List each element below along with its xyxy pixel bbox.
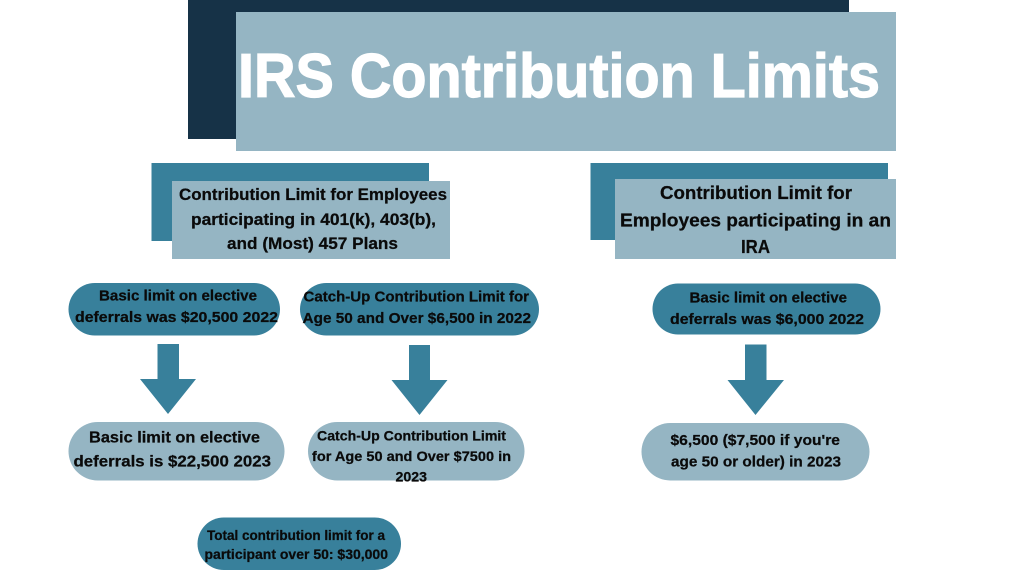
title: IRS Contribution Limits <box>238 42 880 111</box>
heading text <box>179 185 447 253</box>
arrow: catch-up limit <box>392 345 448 415</box>
pill: basic limit 2022: deferrals was $20,500 2022 <box>75 309 278 326</box>
heading text: Contribution Limit for <box>660 183 852 203</box>
heading text: and (Most) 457 Plans <box>227 234 398 253</box>
pill: basic limit 2023: deferrals is $22,500 2023 <box>74 454 271 471</box>
pill: basic limit 2023 <box>68 422 284 480</box>
pill: total contribution limit: Total contribution limit for a <box>207 528 385 543</box>
heading panel <box>615 179 896 259</box>
pill: IRA limit 2023: age 50 or older) in 2023 <box>671 454 841 471</box>
heading backing block <box>590 163 888 240</box>
pill: catch-up limit 2023: for Age 50 and Over $7500 in <box>312 448 511 464</box>
arrow: IRA limit <box>728 344 784 415</box>
pill: IRA limit 2023 <box>642 423 870 480</box>
title backing block <box>188 0 849 139</box>
pill: IRA basic limit 2022: Basic limit on elective <box>690 290 847 307</box>
pill: catch-up limit 2022: Age 50 and Over $6,500 in 2022 <box>302 310 531 327</box>
pill: catch-up limit 2023: 2023 <box>396 468 427 484</box>
pill: catch-up limit 2022 <box>300 283 539 336</box>
heading text: participating in 401(k), 403(b), <box>191 210 436 229</box>
heading text: Employees participating in an <box>620 210 891 230</box>
pill: IRA basic limit 2022: deferrals was $6,000 2022 <box>670 311 864 328</box>
arrow: basic limit <box>140 344 196 414</box>
pill: basic limit 2022: Basic limit on elective <box>99 288 257 304</box>
heading panel <box>172 181 450 259</box>
title banner <box>188 0 896 151</box>
panel: 401(k), 403(b), 457 heading <box>152 163 450 259</box>
panel: IRA heading <box>590 163 896 259</box>
pill: catch-up limit 2023 <box>308 422 524 484</box>
heading text: Contribution Limit for Employees <box>179 185 447 204</box>
pill: basic limit 2023: Basic limit on elective <box>89 430 260 447</box>
pill: IRA limit 2023: $6,500 ($7,500 if you're <box>670 432 840 449</box>
pill: IRA basic limit 2022 <box>652 284 880 334</box>
pill: basic limit 2022 <box>68 283 280 336</box>
pill: catch-up limit 2022: Catch-Up Contribution Limit for <box>304 288 529 306</box>
pill: total contribution limit: participant over 50: $30,000 <box>204 547 388 562</box>
heading backing block <box>152 163 429 241</box>
heading text <box>620 183 891 257</box>
title panel <box>236 12 896 151</box>
heading text: IRA <box>741 237 770 257</box>
pill: catch-up limit 2023: Catch-Up Contribution Limit <box>317 428 506 444</box>
pill: total contribution limit <box>198 518 401 570</box>
